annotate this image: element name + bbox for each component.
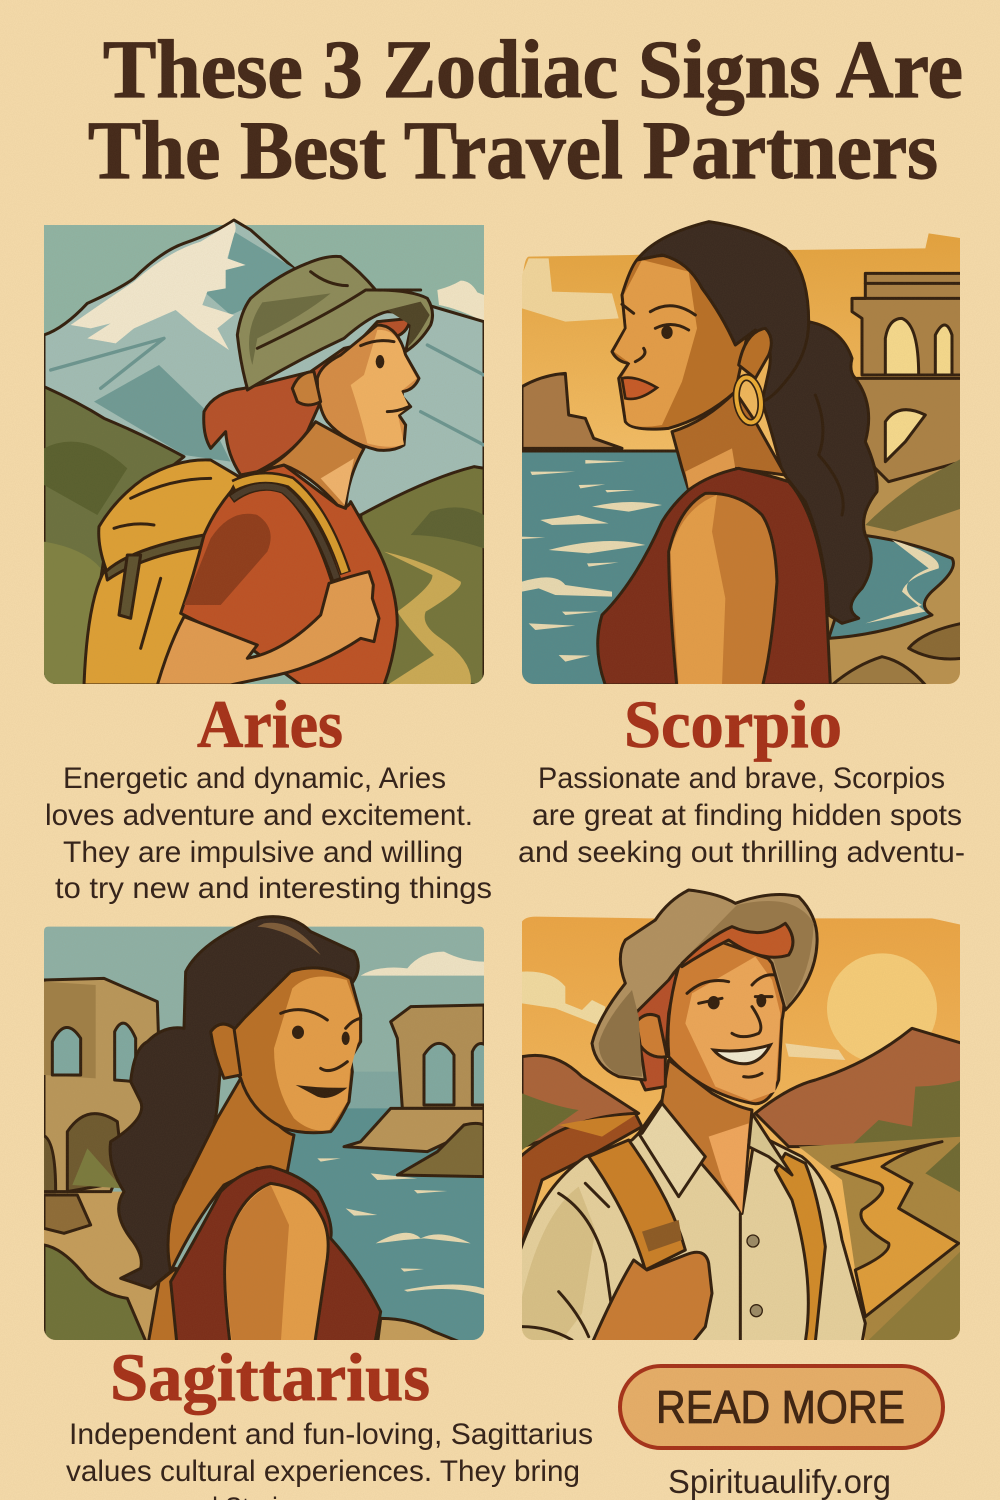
arm — [669, 493, 777, 688]
face — [612, 255, 749, 429]
text block: Scorpio: are great at finding hidden spots — [532, 799, 962, 832]
title: These 3 Zodiac Signs Are — [103, 23, 963, 115]
panel: Scorpio illustration — [519, 222, 962, 688]
heading: Scorpio: Scorpio — [624, 686, 842, 762]
hair back — [622, 963, 679, 1090]
dress — [171, 1167, 381, 1348]
title: The Best Travel Partners — [88, 104, 938, 196]
hair — [110, 917, 358, 1288]
face — [292, 325, 419, 450]
hat — [592, 890, 817, 1080]
button: read more: READ MORE — [656, 1381, 905, 1433]
panel: Aries illustration — [44, 220, 484, 685]
icon: hoop earring — [734, 376, 764, 424]
text block: Sagittarius: Independent and fun-loving, Sagittarius — [69, 1418, 593, 1451]
ruin — [344, 1005, 486, 1177]
shirt — [181, 465, 397, 685]
straps — [589, 1140, 825, 1342]
dress — [598, 468, 830, 685]
heading: Sagittarius: Sagittarius — [110, 1339, 430, 1415]
mountain — [44, 220, 484, 515]
hair front — [682, 923, 793, 967]
text block: Sagittarius: values cultural experiences. They bring — [66, 1455, 580, 1488]
hair parting — [257, 923, 321, 955]
ponytail — [762, 322, 877, 623]
heading: Aries: Aries — [197, 686, 343, 762]
text block: Scorpio — [518, 762, 965, 869]
hat — [237, 256, 433, 390]
text block: Sagittarius — [66, 1418, 593, 1500]
water waves — [317, 1158, 484, 1295]
ruin — [42, 978, 159, 1192]
hand — [592, 1252, 712, 1343]
shirt — [520, 1100, 865, 1343]
hair — [204, 318, 411, 475]
neck — [662, 1060, 752, 1213]
neck — [672, 392, 785, 490]
button: read more — [620, 1366, 943, 1448]
title — [88, 23, 963, 196]
icon: backpack — [84, 460, 239, 685]
text block: Scorpio: Passionate and brave, Scorpios — [538, 762, 945, 795]
face — [635, 940, 784, 1104]
strap — [231, 477, 346, 580]
ground — [828, 468, 960, 684]
winding road — [832, 1142, 959, 1317]
ear — [739, 328, 771, 378]
website credit: Spirituaulify.org — [668, 1463, 891, 1500]
icon: backpack — [520, 1113, 642, 1250]
water waves — [522, 460, 662, 662]
text block: Aries: loves adventure and excitement. — [45, 799, 473, 832]
text block: Aries — [45, 762, 492, 905]
text block: Scorpio: and seeking out thrilling adventu- — [518, 836, 965, 869]
panel: traveler man illustration — [520, 890, 962, 1343]
mountains — [522, 1028, 962, 1163]
text block: Aries: Energetic and dynamic, Aries — [63, 762, 446, 795]
panel: Sagittarius illustration — [42, 917, 486, 1348]
arm — [225, 1183, 328, 1348]
text block: Aries: They are impulsive and willing — [63, 836, 463, 869]
neck — [257, 422, 364, 508]
face — [211, 968, 361, 1133]
ruin — [852, 273, 962, 482]
hair — [637, 222, 809, 402]
neck and back — [147, 1078, 294, 1348]
text block: Aries: to try new and interesting things — [55, 872, 492, 905]
arm — [157, 572, 379, 685]
collar — [639, 1103, 792, 1197]
